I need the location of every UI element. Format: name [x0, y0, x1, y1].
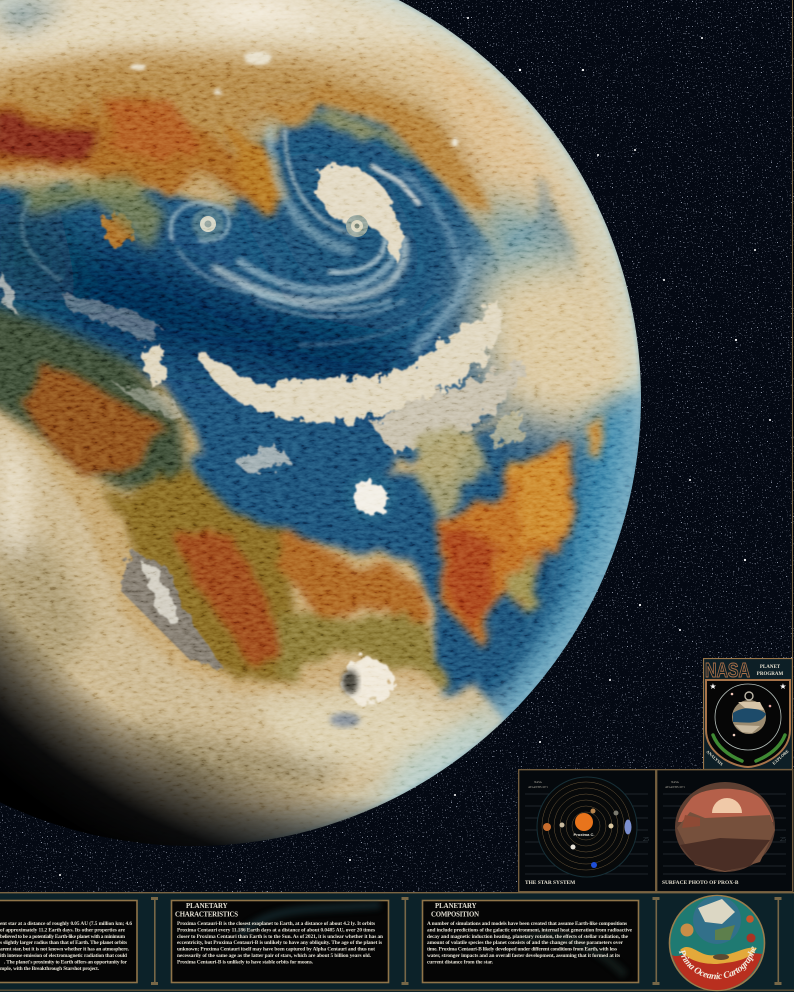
panel: star system and surface photo: NASA — [534, 781, 542, 784]
small swirl — [192, 208, 224, 240]
panel: planetary composition: amount of volatile species the planet consists of and the changes of these parameters over — [427, 940, 624, 946]
panel: planet summary: s slightly larger radius than that of Earth. The planet orbits — [0, 940, 127, 946]
panel: star system and surface photo — [518, 769, 794, 892]
panel: planet summary: mple, with the Breakthrough Starshot project. — [0, 966, 100, 972]
southern storm cloud — [330, 657, 393, 727]
NASA wordmark: PROGRAM — [757, 672, 783, 677]
right limb haze — [470, 100, 650, 440]
panel: star system and surface photo: ATLANTIS 1071 — [528, 786, 548, 789]
planet — [0, 0, 650, 870]
panel: star system and surface photo: 25 — [780, 837, 786, 843]
right edge gold line — [792, 0, 793, 892]
panel: planet summary: of approximately 11.2 Earth days. Its other properties are — [0, 927, 126, 933]
panel: planetary composition: water, stronger impacts and an overall faster development, assuming that it formed at its — [427, 953, 620, 959]
panel captions — [525, 880, 739, 886]
swirl arms — [22, 130, 470, 350]
panel: planetary characteristics: eccentricity, but Proxima Centauri-B is unlikely to have any obliquity. The age of the planet is — [177, 940, 382, 946]
panel: planetary composition: A number of simulations and models have been created that assume Earth-like compositions — [427, 921, 627, 927]
panel: planetary characteristics: CHARACTERISTICS — [175, 912, 238, 918]
panel: planetary composition: COMPOSITION — [431, 912, 479, 918]
panel: planetary characteristics — [172, 900, 388, 982]
western land — [20, 365, 170, 478]
ocean — [0, 108, 650, 770]
cloud band — [140, 298, 524, 452]
badge planet — [732, 692, 766, 734]
north cream cap — [0, 0, 450, 70]
bottom information strip — [0, 892, 794, 992]
top scattered rocks — [130, 27, 458, 147]
far western dark coast — [0, 300, 190, 490]
panel: planet summary: ith intense emission of electromagnetic radiation that could — [0, 953, 127, 959]
panel: planet summary: . The planet's proximity to Earth offers an opportunity for — [4, 959, 128, 965]
NASA wordmark: PLANET — [760, 665, 781, 670]
panel: planet summary: believed to be a potentially Earth-like planet with a minimum — [0, 934, 126, 940]
panel: star system and surface photo: 25 — [643, 837, 649, 843]
panel: planetary characteristics: PLANETARY — [186, 903, 228, 910]
small white storm — [348, 474, 392, 520]
scattered white clouds — [0, 270, 525, 475]
diagram: star system orbits — [537, 777, 637, 877]
NASA wordmark: NASA — [705, 660, 750, 682]
panel: planetary composition: and include predictions of the galactic environment, internal heat generation from radioactive — [427, 927, 633, 933]
panel: planet summary: ent star at a distance of roughly 0.05 AU (7.5 million km; 4.6 — [0, 920, 132, 927]
panel: planetary characteristics: necessarily of the same age as the latter pair of stars, which are about 5 billion years old. — [177, 953, 372, 959]
panel: planetary characteristics: Proxima Centauri every 11.186 Earth days at a distance of about 0.0485 AU, over 20 times — [177, 927, 375, 933]
southern rust continents — [110, 415, 605, 685]
NASA mission badge — [703, 658, 793, 769]
panel captions: SURFACE PHOTO OF PROX-B — [662, 880, 739, 886]
badge captions — [705, 748, 790, 767]
panel: planet summary — [0, 900, 137, 982]
panel: planetary characteristics: unknown; Proxima Centauri itself may have been captured by Alpha Centauri and thus not — [177, 947, 375, 953]
panel: planetary characteristics: Proxima Centauri-B is the closest exoplanet to Earth, at a distance of about 4.2 ly. It orbits — [177, 921, 375, 927]
badge captions: ANALYSIS — [705, 749, 725, 767]
shield: ★ — [709, 682, 717, 691]
panel: planetary characteristics: Proxima Centauri-B is unlikely to have stable orbits for moons. — [177, 959, 314, 965]
panel: planetary composition: decay and magnetic induction heating, planetary rotation, the effects of stellar radiation, the — [427, 934, 629, 940]
north-west rust continent — [0, 90, 500, 220]
panel: star system and surface photo: ATLANTIS 1071 — [665, 786, 685, 789]
hurricane eye cloud — [318, 164, 420, 262]
laurels — [713, 735, 785, 761]
panel: planet summary: arent star, but it is not known whether it has an atmosphere. — [0, 947, 130, 953]
texture — [0, 0, 650, 860]
mountain ridge — [120, 550, 225, 670]
island — [102, 214, 134, 246]
shield: ★ — [779, 682, 787, 691]
lower left cream swath — [0, 408, 506, 830]
panel: planetary characteristics: closer to Proxima Centauri than Earth is to the Sun. As of 2021, it is unclear whether it has an — [177, 934, 383, 940]
panel: planetary composition: time. Proxima Centauri-B likely developed under different conditions from Earth, with less — [427, 947, 617, 953]
badge captions: EXPLORE — [771, 748, 790, 766]
panel captions: THE STAR SYSTEM — [525, 880, 575, 886]
diagram: surface photo — [675, 782, 775, 872]
diagram: star system orbits: Proxima C. — [574, 832, 594, 837]
panel: planetary composition: PLANETARY — [435, 903, 477, 910]
panel: star system and surface photo: NASA — [671, 781, 679, 784]
shield — [706, 680, 790, 767]
ochre belt — [0, 36, 508, 195]
panel: planetary composition — [422, 900, 638, 982]
panel: planetary composition: current distance from the star. — [427, 959, 494, 965]
olive shallows — [20, 175, 165, 250]
